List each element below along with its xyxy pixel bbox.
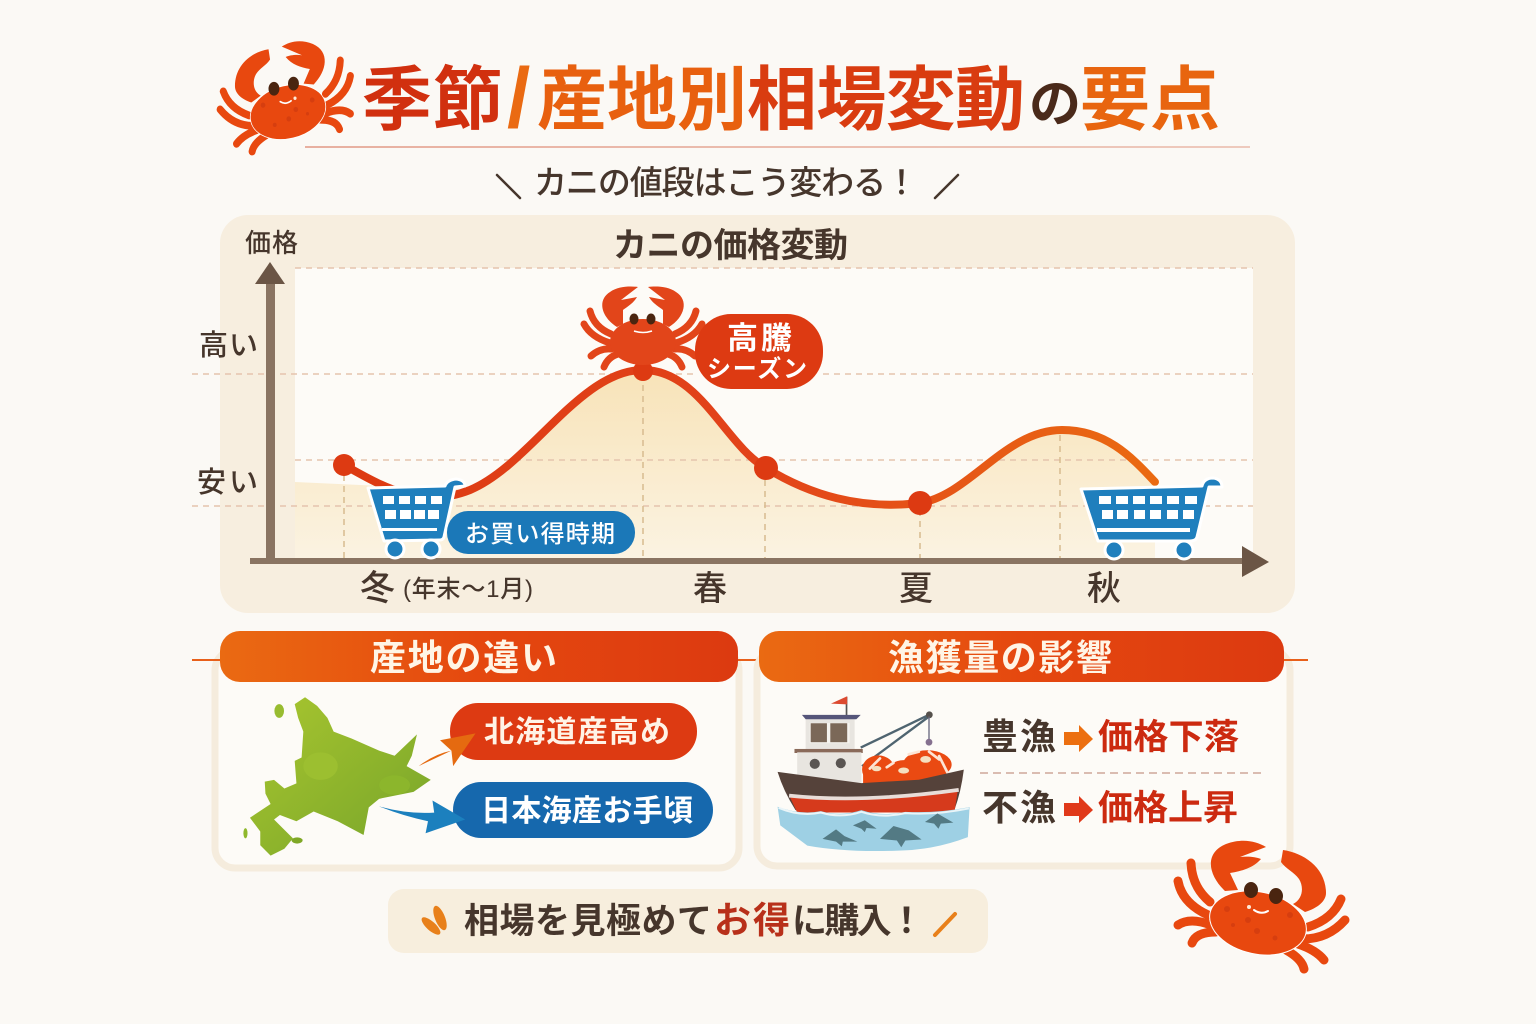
map: Hokkaido xyxy=(243,697,431,856)
x labels: 秋 xyxy=(1087,570,1121,608)
banner text: 相場を見極めて xyxy=(464,902,712,941)
callout: peak season: シーズン xyxy=(707,355,807,383)
callout: bargain period xyxy=(447,511,635,554)
marks left xyxy=(419,904,450,937)
panel: price chart xyxy=(192,215,1295,613)
icon: corner crab xyxy=(1178,841,1345,969)
panel: catch impact xyxy=(757,631,1308,866)
subtitle: カニの値段はこう変わる！ xyxy=(534,164,918,201)
text: good catch xyxy=(982,716,1239,757)
text: poor catch: 不漁 xyxy=(982,787,1056,828)
callout: peak season xyxy=(695,314,823,389)
heading: catch xyxy=(759,631,1284,682)
title: 季節 xyxy=(362,61,503,139)
callout: Hokkaido price: 北海道産高め xyxy=(484,716,670,749)
label: low: 安い xyxy=(197,466,258,499)
banner: buy smart xyxy=(388,889,988,953)
label: high: 高い xyxy=(199,329,258,362)
x labels xyxy=(360,569,1121,608)
heading: origin xyxy=(220,631,738,682)
area under curve xyxy=(295,370,1155,560)
x axis xyxy=(250,546,1269,577)
icon: peak crab xyxy=(584,287,702,367)
callout: Sea of Japan price xyxy=(453,782,713,838)
y axis label: 価格 xyxy=(245,228,298,258)
curve points xyxy=(333,361,932,515)
icon: left cart xyxy=(368,479,465,558)
x labels: 春 xyxy=(693,570,727,608)
heading: catch: 漁獲量の影響 xyxy=(888,637,1112,678)
price curve xyxy=(344,370,1155,505)
banner text: お得 xyxy=(714,900,790,941)
banner text xyxy=(464,900,924,941)
text: good catch: 価格下落 xyxy=(1098,718,1239,757)
callout: Hokkaido price xyxy=(450,703,697,760)
x labels: 冬 xyxy=(360,569,395,608)
panel: origin differences xyxy=(192,631,762,868)
heading: origin: 産地の違い xyxy=(370,637,557,678)
text: good catch: 豊漁 xyxy=(982,716,1056,757)
arrow: orange xyxy=(419,733,476,766)
x labels: 夏 xyxy=(899,570,933,608)
x labels: (年末〜1月) xyxy=(403,576,533,603)
icon: title crab xyxy=(220,41,350,152)
chart heading: カニの価格変動 xyxy=(613,227,848,265)
icon: fishing boat xyxy=(778,696,970,851)
callout: bargain period: お買い得時期 xyxy=(465,521,615,548)
title: の xyxy=(1029,76,1081,134)
title: 要点 xyxy=(1080,61,1220,139)
banner text: に購入！ xyxy=(792,902,924,941)
callout: Sea of Japan price: 日本海産お手頃 xyxy=(481,795,693,828)
text: poor catch: 価格上昇 xyxy=(1098,789,1238,828)
arrow: blue xyxy=(379,801,465,833)
title: 相場変動 xyxy=(747,61,1025,139)
callout: peak season: 高騰 xyxy=(727,321,792,356)
title xyxy=(362,51,1220,145)
text: poor catch xyxy=(982,787,1238,828)
title: / xyxy=(507,51,530,145)
y axis xyxy=(255,262,285,560)
plot area xyxy=(295,268,1253,560)
marks right xyxy=(935,914,955,935)
title underline xyxy=(305,146,1250,148)
title: 産地別 xyxy=(537,61,747,139)
icon: right cart xyxy=(1081,478,1222,559)
